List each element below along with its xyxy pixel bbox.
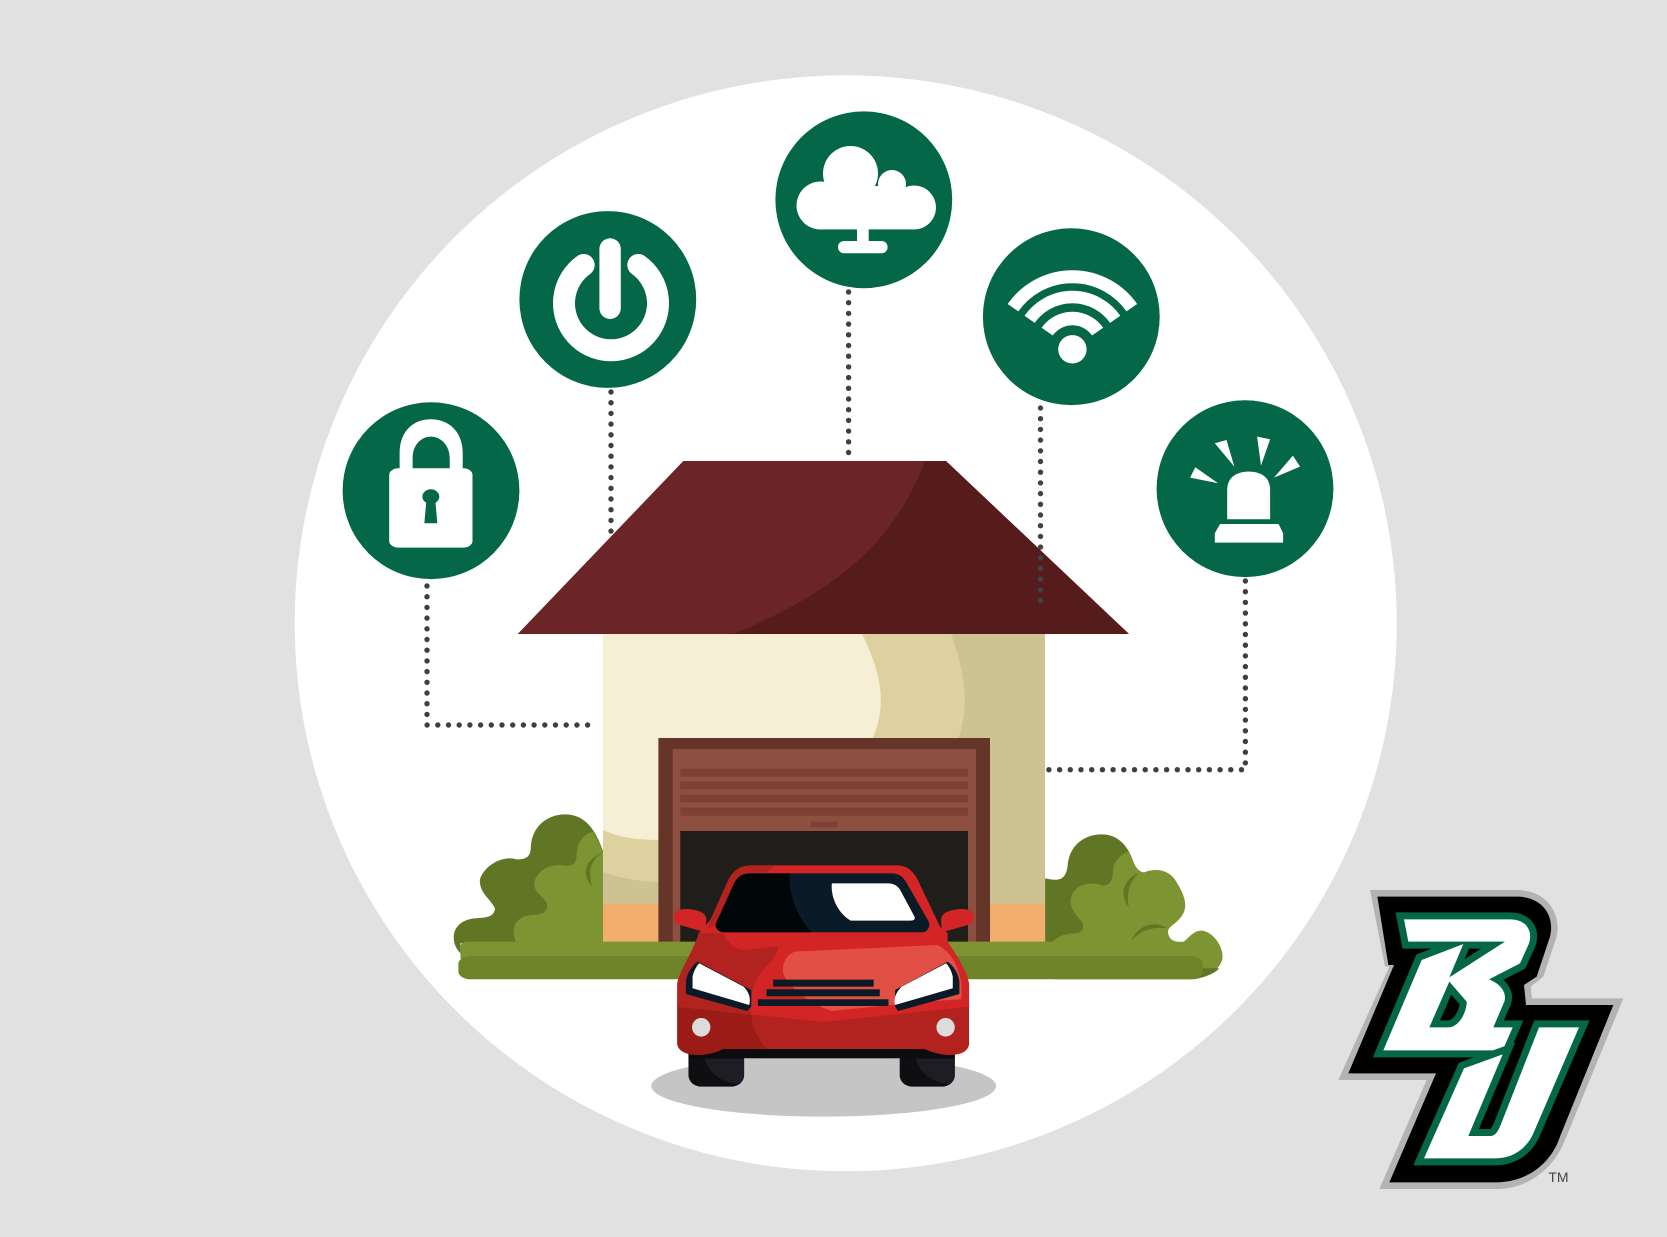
icon: wifi	[983, 228, 1160, 405]
ground and car	[458, 865, 1203, 1117]
icon: alarm siren	[1157, 400, 1333, 577]
logo grey outline	[1338, 890, 1623, 1189]
right bush	[1045, 834, 1223, 979]
trademark: TM	[1548, 1169, 1569, 1185]
hood side shade	[677, 933, 778, 1015]
lower bumper	[677, 1005, 969, 1055]
windshield dark side	[716, 873, 811, 932]
right headlight	[895, 962, 959, 1011]
dotted connector: alarm to wall	[1041, 581, 1245, 770]
mirrors	[674, 909, 974, 932]
left headlight	[686, 962, 751, 1011]
grille	[758, 980, 888, 1006]
dotted connector: cloud to roof	[846, 292, 851, 462]
ground strip	[458, 942, 1203, 979]
white circle backdrop	[295, 75, 1397, 1171]
icon: cloud network	[775, 111, 952, 288]
logo: BU monogram	[1338, 890, 1623, 1189]
dotted connector: wifi over roof	[1038, 408, 1043, 603]
car shadow	[651, 1055, 996, 1117]
pillar shade	[708, 865, 774, 928]
hood highlight	[783, 945, 961, 1011]
icon: lock	[343, 402, 519, 579]
wheels	[688, 1048, 955, 1087]
garage door	[658, 738, 990, 942]
icon: power button	[519, 211, 696, 388]
windshield	[716, 873, 929, 932]
left bush	[454, 814, 603, 953]
letter U	[1424, 1027, 1579, 1158]
car body	[677, 865, 969, 1022]
letter B	[1383, 919, 1530, 1050]
windshield glare	[832, 883, 915, 921]
house	[518, 461, 1129, 942]
roof	[518, 461, 1129, 634]
wall	[603, 634, 1045, 942]
logo black outline	[1348, 897, 1613, 1182]
bumper shade	[677, 1005, 767, 1055]
dotted connector: power to roof	[608, 392, 614, 541]
fog lights	[692, 1018, 955, 1037]
bushes	[454, 814, 1223, 979]
dotted connector: lock to wall	[427, 586, 594, 725]
car	[674, 865, 974, 1087]
